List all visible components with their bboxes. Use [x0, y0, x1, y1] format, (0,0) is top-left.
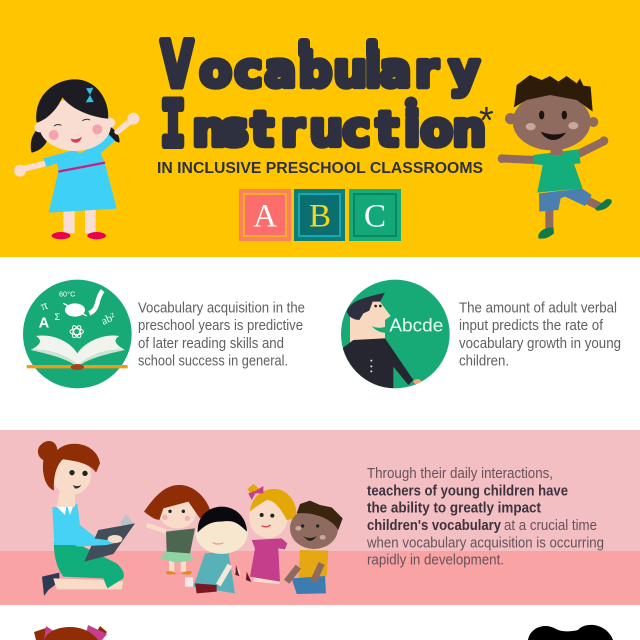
text block: of later reading skills and: [138, 335, 284, 352]
child: boy with curly hair: [287, 501, 343, 594]
text block: teachers impact: children's vocabulary: [367, 517, 502, 534]
text block: teachers impact: rapidly in development.: [367, 552, 504, 569]
title: V: [161, 28, 193, 101]
text block: Vocabulary acquisition in the: [138, 300, 305, 316]
icon: open book with science symbols: [23, 280, 132, 388]
title: ocabulary: [200, 44, 480, 98]
group of four children: [144, 484, 343, 594]
icon: open book with science symbols: π: [39, 298, 50, 313]
header band: [0, 0, 640, 257]
text block: preschool years is predictive: [138, 317, 303, 334]
alphabet blocks: [239, 189, 401, 241]
icon: man speaking letters: [340, 280, 450, 393]
title: *: [479, 100, 494, 142]
text block: [459, 300, 621, 370]
alphabet blocks: C: [364, 198, 386, 234]
child: girl with red hair: [144, 485, 211, 575]
text block: The amount of adult verbal: [459, 300, 617, 316]
text block: school success in general.: [138, 352, 288, 370]
subtitle: IN INCLUSIVE PRESCHOOL CLASSROOMS: [157, 160, 483, 177]
title: nstruction: [192, 102, 486, 158]
title: I: [161, 89, 185, 166]
icon: open book with science symbols: ab²: [100, 311, 118, 328]
text block: input predicts the rate of: [459, 317, 604, 334]
icon: open book with science symbols: 60°C: [59, 290, 76, 299]
text block: teachers impact: at a crucial time: [504, 517, 597, 534]
text block: teachers impact: [366, 465, 604, 569]
teacher reading a book: [38, 441, 135, 596]
icon: open book with science symbols: A: [39, 315, 50, 331]
icon: open book with science symbols: Σ: [54, 312, 60, 322]
text block: teachers impact: Through their daily interactions,: [367, 465, 553, 482]
child: boy with black hair: [185, 507, 248, 593]
text block: teachers impact: when vocabulary acquisition is occurring: [366, 534, 604, 551]
icon: man speaking letters: Abcde: [389, 315, 443, 336]
text block: children.: [459, 352, 509, 370]
panel: adult verbal input: [340, 280, 621, 393]
boy character: [498, 75, 612, 239]
alphabet blocks: A: [253, 198, 277, 234]
panel: vocabulary acquisition: [23, 280, 305, 388]
cropped black-haired character at bottom: [528, 625, 613, 640]
text block: teachers impact: teachers of young children have: [367, 482, 568, 499]
cropped girl character at bottom: [34, 625, 107, 640]
child: blonde girl: [235, 484, 296, 582]
text block: vocabulary growth in young: [459, 335, 621, 352]
title: [161, 28, 494, 166]
girl character: [14, 79, 139, 239]
panel: teachers background: [0, 430, 640, 605]
text block: [138, 300, 305, 370]
text block: teachers impact: the ability to greatly impact: [367, 500, 541, 517]
alphabet blocks: B: [309, 198, 331, 234]
